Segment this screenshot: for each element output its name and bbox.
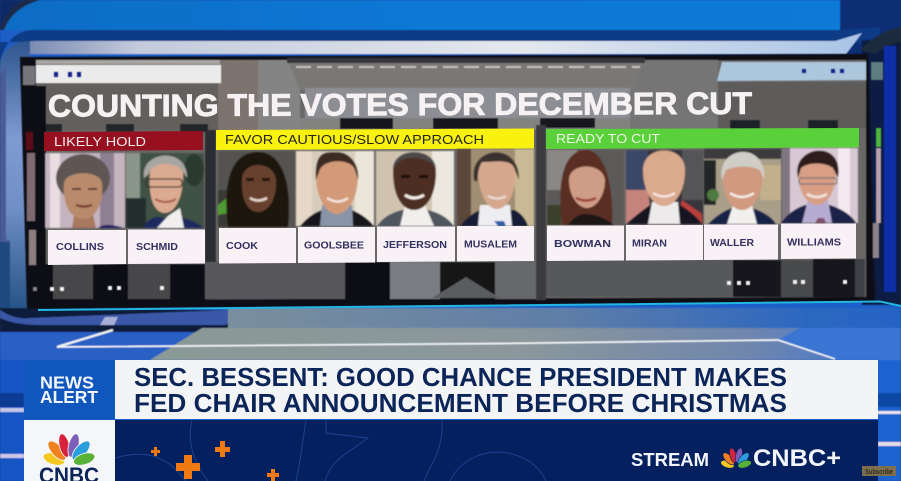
name card: Musalem: MUSALEM xyxy=(464,238,517,250)
name card: Bowman xyxy=(547,226,624,261)
map contour lines xyxy=(115,420,546,481)
orange plus marks xyxy=(151,441,279,481)
name card: Schmid: SCHMID xyxy=(136,241,178,253)
name card: Musalem xyxy=(457,226,534,262)
dark doors at the foot of the building xyxy=(46,259,865,300)
lower third: news alert tag: ALERT xyxy=(40,387,98,407)
portrait: Waller xyxy=(704,149,781,224)
name card: Jefferson xyxy=(377,226,455,262)
icon: peacock logo xyxy=(44,434,94,465)
icon: small peacock xyxy=(720,447,752,470)
cyan edge light under the wall xyxy=(38,302,901,310)
portrait: Jefferson xyxy=(376,151,454,226)
name card: Jefferson: JEFFERSON xyxy=(383,239,447,251)
name card: Miran xyxy=(626,225,703,260)
name card: Waller: WALLER xyxy=(710,237,754,249)
subscribe watermark: Subscribe xyxy=(865,467,893,476)
group header: likely hold: LIKELY HOLD xyxy=(54,134,146,149)
name card: Waller xyxy=(704,224,778,260)
name card: Schmid xyxy=(128,230,205,264)
portrait: Miran with flag xyxy=(626,150,703,224)
name card: Collins xyxy=(48,230,126,265)
lower third: navy promo strip xyxy=(115,420,878,481)
name card: Cook: COOK xyxy=(226,240,258,252)
portrait: Williams xyxy=(781,148,858,223)
name card: Cook xyxy=(219,228,296,264)
name card: Miran: MIRAN xyxy=(632,238,667,250)
stream CNBC+ promo xyxy=(631,445,841,472)
portrait: Bowman xyxy=(547,150,624,225)
lower third: CNBC logo tile xyxy=(24,420,115,481)
name card: Goolsbee xyxy=(298,227,375,263)
portrait: Goolsbee xyxy=(296,151,374,226)
window dots on the wall xyxy=(33,69,847,291)
name card: Williams: WILLIAMS xyxy=(787,236,841,248)
lower third: news alert tag: NEWS xyxy=(40,372,94,392)
name card: Collins: COLLINS xyxy=(56,241,104,253)
portrait: Cook xyxy=(218,151,295,227)
group header: likely hold xyxy=(44,131,203,151)
lower third: headline: FED CHAIR ANNOUNCEMENT BEFORE CHRISTMAS xyxy=(134,388,787,418)
group header: ready to cut: READY TO CUT xyxy=(556,131,660,146)
group header: ready to cut xyxy=(546,128,859,149)
neighbouring screen sliver xyxy=(871,62,883,258)
name card: Goolsbee: GOOLSBEE xyxy=(304,240,364,252)
stream CNBC+ promo: CNBC+ xyxy=(753,445,841,472)
lower third: news alert tag xyxy=(24,360,115,419)
lower third: headline xyxy=(115,360,878,419)
video wall: building backdrop xyxy=(20,54,883,309)
portrait: Schmid xyxy=(126,153,204,228)
portrait: Collins xyxy=(45,153,125,228)
stream CNBC+ promo: STREAM xyxy=(631,450,709,470)
group header: favor cautious/slow approach xyxy=(216,128,534,150)
name card: Bowman: BOWMAN xyxy=(554,238,611,250)
portrait: Musalem xyxy=(457,149,534,226)
group header: favor cautious/slow approach: FAVOR CAUTIOUS/SLOW APPROACH xyxy=(225,132,484,147)
title: COUNTING THE VOTES FOR DECEMBER CUT xyxy=(48,86,752,123)
lower third: headline: SEC. BESSENT: GOOD CHANCE PRESIDENT MAKES xyxy=(134,362,787,392)
name card: Williams xyxy=(781,224,856,259)
